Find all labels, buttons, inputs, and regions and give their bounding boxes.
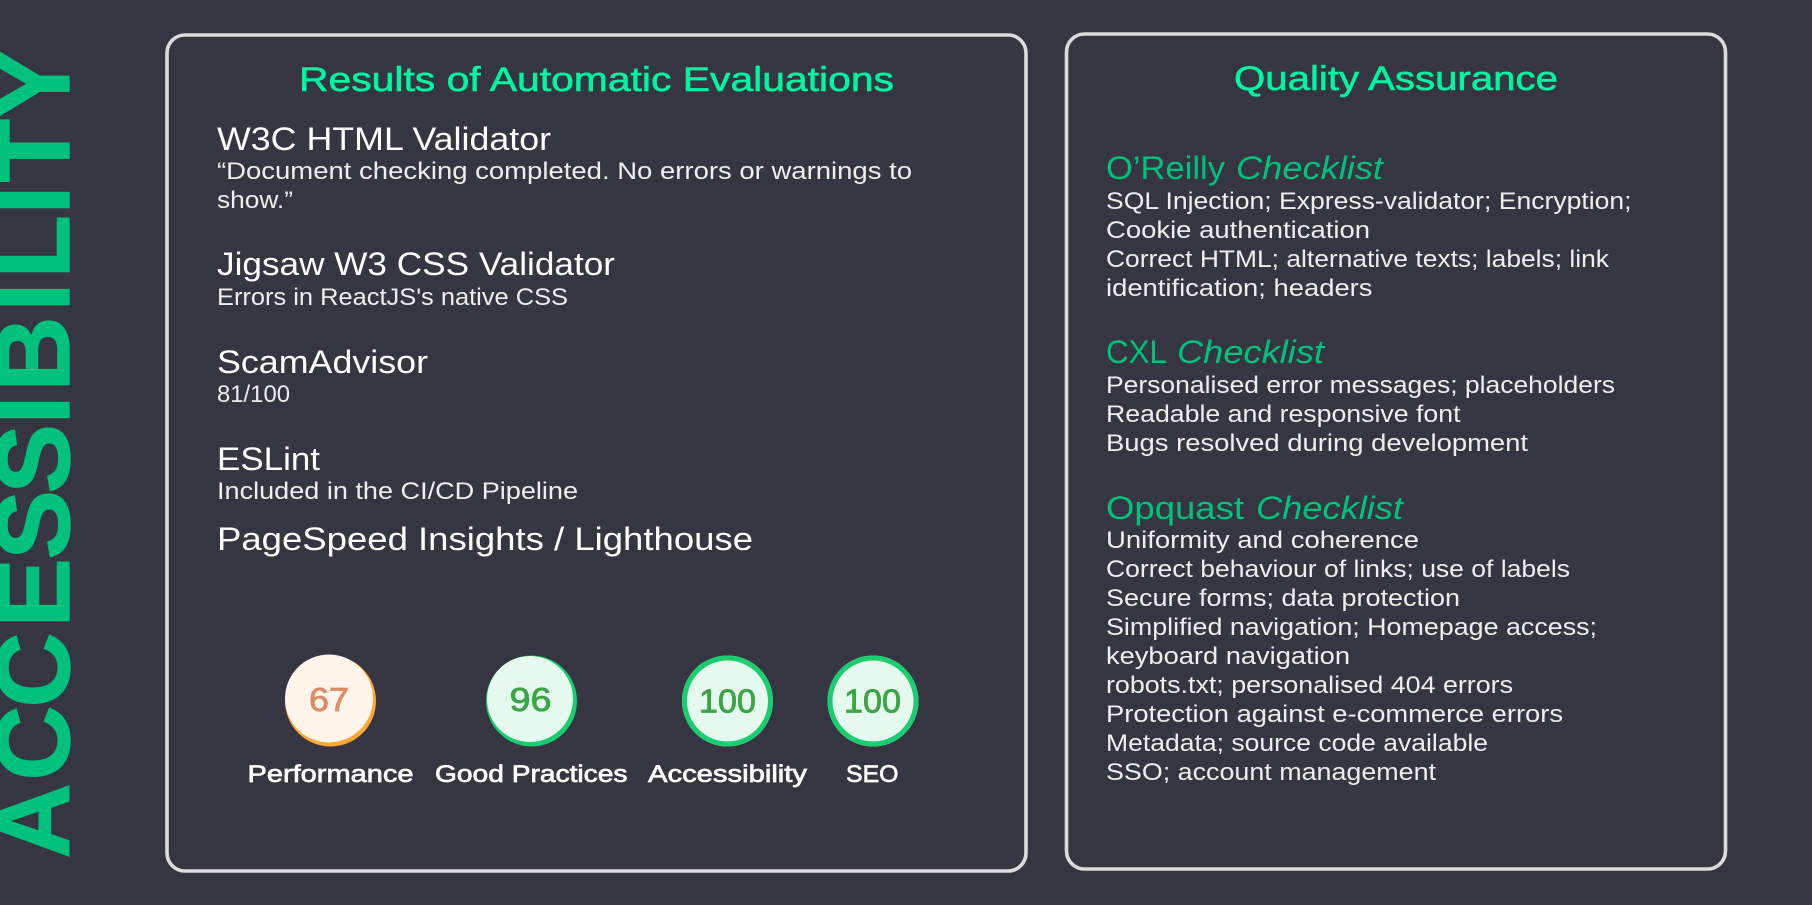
- checklist: Opquast: Correct behaviour of links; use of labels: [1106, 556, 1570, 583]
- text block: Jigsaw W3 CSS Validator: [217, 246, 615, 311]
- checklist: O'Reilly: Cookie authentication: [1106, 217, 1370, 244]
- checklist: O'Reilly: Correct HTML; alternative texts; labels; link: [1106, 246, 1610, 273]
- text block: Jigsaw W3 CSS Validator: Jigsaw W3 CSS Validator: [217, 246, 615, 282]
- checklist: Opquast: Protection against e-commerce errors: [1106, 701, 1563, 728]
- checklist: CXL: Checklist: [1177, 334, 1325, 370]
- checklist: O'Reilly: SQL Injection; Express-validator; Encryption;: [1106, 188, 1632, 215]
- gauge: good practices 96: [435, 656, 628, 788]
- checklist: CXL: Bugs resolved during development: [1106, 430, 1528, 457]
- gauge: performance 67: Performance: [248, 761, 414, 788]
- gauge: performance 67: [248, 654, 414, 788]
- text block: ScamAdvisor: [217, 344, 428, 408]
- checklist: O'Reilly: O’Reilly: [1106, 150, 1225, 186]
- text block: Jigsaw W3 CSS Validator: Errors in ReactJS's native CSS: [217, 284, 568, 311]
- checklist: Opquast: Simplified navigation; Homepage access;: [1106, 614, 1597, 641]
- gauge: SEO 100: 100: [844, 684, 901, 720]
- checklist: Opquast: Checklist: [1256, 490, 1404, 526]
- gauge: accessibility 100: 100: [699, 684, 756, 720]
- panel: results of automatic evaluations: [167, 35, 1026, 871]
- checklist: CXL: Readable and responsive font: [1106, 401, 1461, 428]
- heading: PageSpeed Insights / Lighthouse: PageSpeed Insights / Lighthouse: [217, 521, 753, 557]
- text block: ESLint: [217, 441, 578, 505]
- gauge: good practices 96: 96: [510, 682, 552, 719]
- text block: W3C HTML Validator: W3C HTML Validator: [217, 121, 551, 157]
- checklist: Opquast: keyboard navigation: [1106, 643, 1350, 670]
- gauge: SEO 100: [828, 656, 918, 788]
- heading: quality assurance: Quality Assurance: [1234, 60, 1558, 98]
- text block: ESLint: ESLint: [217, 441, 320, 477]
- gauge: good practices 96: Good Practices: [435, 761, 628, 788]
- checklist: O'Reilly: identification; headers: [1106, 275, 1372, 302]
- gauge: accessibility 100: [648, 656, 807, 788]
- checklist: Opquast: Opquast: [1106, 490, 1244, 526]
- text block: ScamAdvisor: 81/100: [217, 381, 290, 408]
- text block: ScamAdvisor: ScamAdvisor: [217, 344, 428, 380]
- checklist: CXL: Personalised error messages; placeholders: [1106, 372, 1615, 399]
- checklist: Opquast: [1106, 490, 1597, 786]
- checklist: Opquast: Uniformity and coherence: [1106, 527, 1419, 554]
- text block: ESLint: Included in the CI/CD Pipeline: [217, 478, 578, 505]
- checklist: CXL: CXL: [1106, 334, 1167, 370]
- text block: W3C HTML Validator: show.”: [217, 187, 293, 214]
- checklist: Opquast: robots.txt; personalised 404 errors: [1106, 672, 1513, 699]
- gauge: accessibility 100: Accessibility: [648, 761, 807, 788]
- checklist: Opquast: Secure forms; data protection: [1106, 585, 1460, 612]
- text block: W3C HTML Validator: “Document checking completed. No errors or warnings to: [217, 158, 912, 185]
- checklist: CXL: [1106, 334, 1615, 457]
- gauge: performance 67: 67: [309, 682, 349, 719]
- checklist: O'Reilly: Checklist: [1236, 150, 1384, 186]
- gauge: SEO 100: SEO: [846, 761, 898, 788]
- checklist: Opquast: Metadata; source code available: [1106, 730, 1488, 757]
- checklist: O'Reilly: [1106, 150, 1632, 302]
- panel: quality assurance: [1066, 34, 1726, 869]
- heading: results of automatic evaluations: Results of Automatic Evaluations: [299, 61, 894, 99]
- checklist: Opquast: SSO; account management: [1106, 759, 1436, 786]
- text block: W3C HTML Validator: [217, 121, 912, 214]
